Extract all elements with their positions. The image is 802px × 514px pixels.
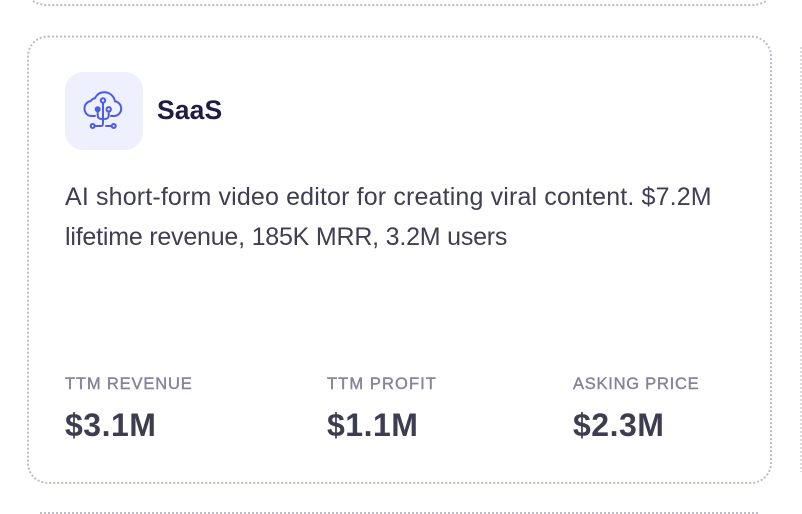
value: $2.3M	[573, 407, 664, 443]
previous card edge	[33, 1, 766, 5]
value: $3.1M	[65, 407, 156, 443]
icon tile: AI cloud	[65, 72, 143, 150]
metric: TTM profit	[327, 375, 437, 443]
adjacent card edge	[800, 47, 802, 472]
metric: asking price	[572, 375, 699, 443]
label: TTM PROFIT	[327, 375, 437, 393]
description text	[65, 183, 712, 251]
icon: cloud circuit	[84, 91, 122, 129]
label: ASKING PRICE	[573, 375, 699, 393]
description text: AI short-form video editor for creating viral content. $7.2M	[65, 183, 712, 211]
heading: SaaS: SaaS	[157, 95, 222, 125]
value: $1.1M	[327, 407, 418, 443]
next card edge	[40, 512, 760, 514]
label: TTM REVENUE	[65, 375, 193, 393]
description text: lifetime revenue, 185K MRR, 3.2M users	[65, 223, 507, 251]
metric: TTM revenue	[65, 375, 193, 443]
